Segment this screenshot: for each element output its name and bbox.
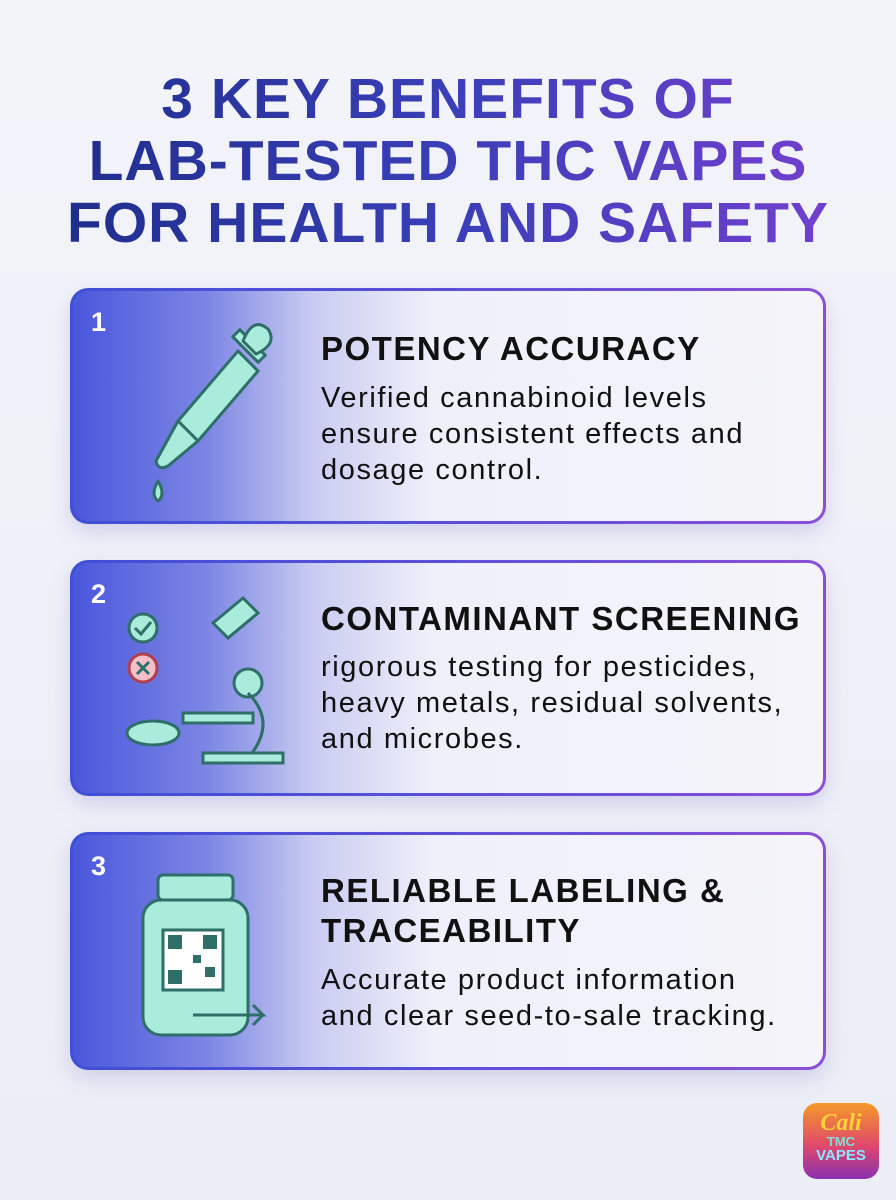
logo: TMC (827, 1134, 855, 1149)
text: and clear seed-to-sale tracking. (321, 1000, 777, 1032)
heading: CONTAMINANT SCREENING (321, 600, 801, 637)
title (0, 68, 896, 254)
logo: Cali (820, 1110, 862, 1136)
text (321, 382, 744, 486)
panel: potency accuracy (70, 288, 826, 524)
logo (803, 1103, 879, 1179)
text: heavy metals, residual solvents, (321, 687, 783, 719)
text: and microbes. (321, 723, 524, 755)
panel: contaminant screening (70, 560, 826, 796)
logo: VAPES (816, 1147, 866, 1164)
text: Verified cannabinoid levels (321, 382, 708, 414)
heading: TRACEABILITY (321, 912, 581, 949)
text: dosage control. (321, 454, 543, 486)
icon: microscope (126, 596, 284, 764)
text (321, 964, 777, 1032)
title: FOR HEALTH AND SAFETY (67, 191, 829, 255)
number 1: 1 (91, 307, 106, 337)
icon: dropper (152, 323, 273, 502)
number 2: 2 (91, 579, 106, 609)
text: Accurate product information (321, 964, 737, 996)
number 3: 3 (91, 851, 106, 881)
text: ensure consistent effects and (321, 418, 744, 450)
heading: RELIABLE LABELING & (321, 872, 725, 909)
heading (321, 872, 725, 949)
icon: bottle with QR (142, 874, 266, 1036)
panel: labeling traceability (70, 832, 826, 1070)
title: 3 KEY BENEFITS OF (161, 67, 735, 131)
heading: POTENCY ACCURACY (321, 330, 701, 367)
text: rigorous testing for pesticides, (321, 651, 757, 683)
text (321, 651, 783, 755)
title: LAB-TESTED THC VAPES (89, 129, 807, 193)
